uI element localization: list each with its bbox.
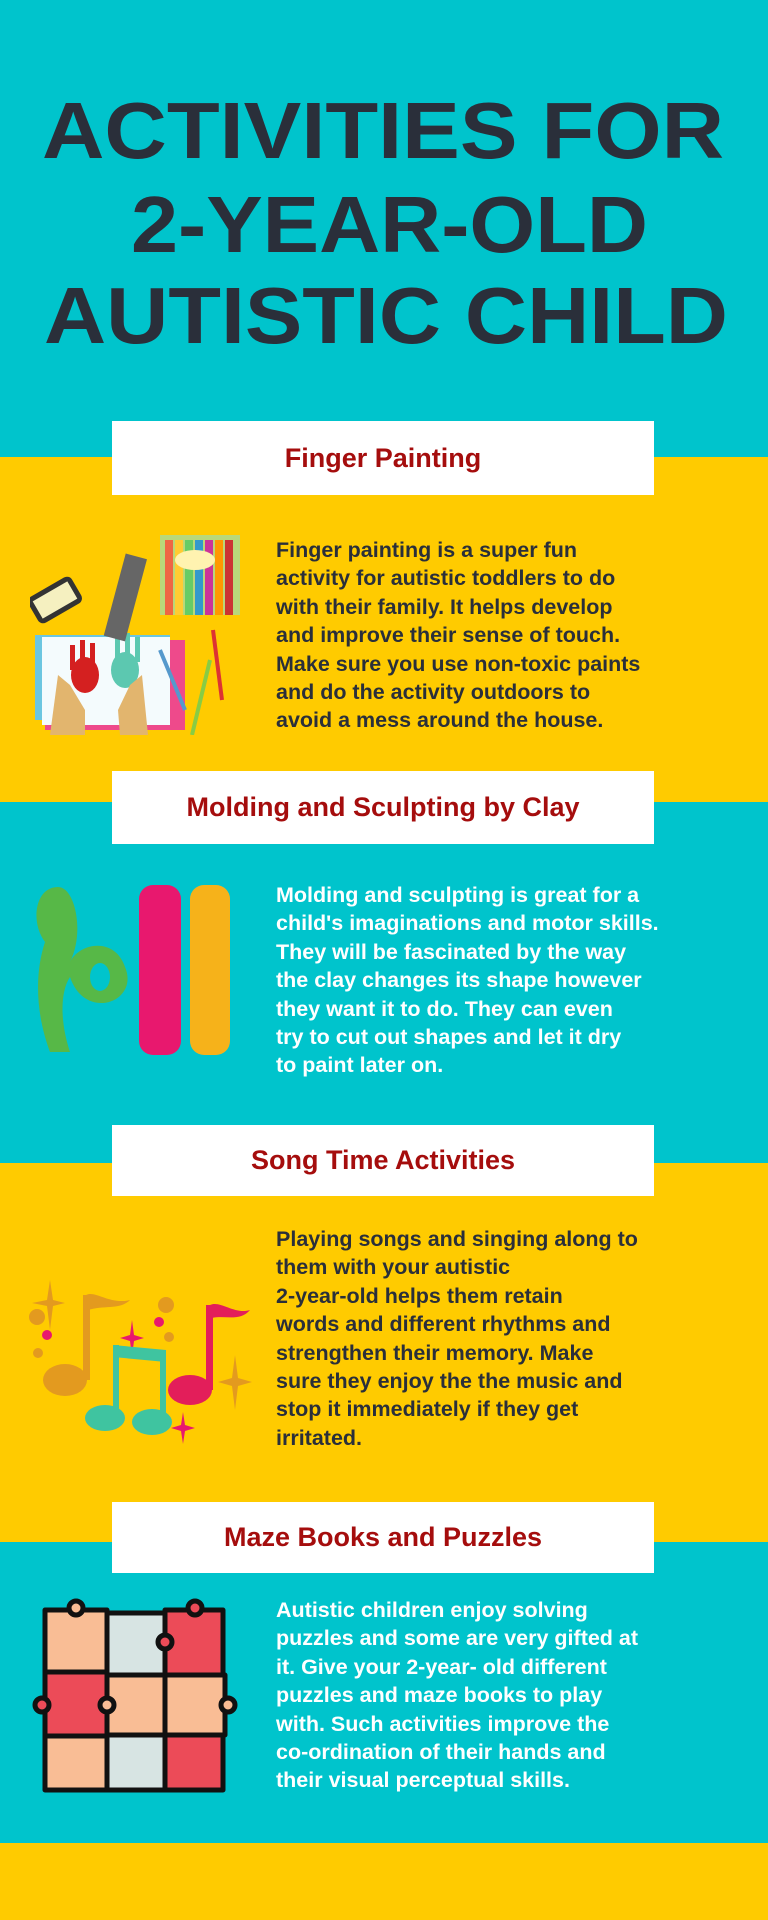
text: maze books: with. Such activities improve the bbox=[276, 1712, 609, 1736]
text: finger painting: activity for autistic toddlers to do bbox=[276, 566, 615, 590]
text: molding: to paint later on. bbox=[276, 1053, 443, 1077]
text: maze books bbox=[276, 1598, 638, 1792]
text: maze books: their visual perceptual skills. bbox=[276, 1768, 570, 1792]
icon: finger painting bbox=[30, 535, 240, 735]
text: song time: them with your autistic bbox=[276, 1255, 510, 1279]
text: song time bbox=[276, 1227, 638, 1450]
header: song time: Song Time Activities bbox=[251, 1145, 515, 1175]
text: molding: they want it to do. They can even bbox=[276, 997, 613, 1021]
text: molding: Molding and sculpting is great for a bbox=[276, 883, 639, 907]
text: molding: They will be fascinated by the way bbox=[276, 940, 626, 964]
text: finger painting: and do the activity outdoors to bbox=[276, 680, 590, 704]
text: finger painting: with their family. It helps develop bbox=[276, 595, 612, 619]
text: molding: child's imaginations and motor skills. bbox=[276, 911, 659, 935]
title: AUTISTIC CHILD bbox=[44, 271, 728, 360]
title bbox=[42, 86, 728, 360]
icon: puzzle bbox=[32, 1598, 238, 1792]
text: molding bbox=[276, 883, 659, 1077]
header: finger painting: Finger Painting bbox=[285, 442, 481, 472]
text: molding: try to cut out shapes and let it dry bbox=[276, 1025, 621, 1049]
header: molding bbox=[112, 771, 654, 844]
text: maze books: puzzles and maze books to play bbox=[276, 1683, 602, 1707]
header: finger painting bbox=[112, 421, 654, 495]
text: maze books: it. Give your 2-year- old different bbox=[276, 1655, 607, 1679]
text: finger painting bbox=[276, 538, 640, 732]
text: song time: sure they enjoy the the music and bbox=[276, 1369, 622, 1393]
header: molding: Molding and Sculpting by Clay bbox=[186, 792, 580, 822]
text: song time: Playing songs and singing along to bbox=[276, 1227, 638, 1251]
title: 2-YEAR-OLD bbox=[131, 180, 648, 269]
text: song time: irritated. bbox=[276, 1426, 362, 1450]
header: maze books bbox=[112, 1502, 654, 1573]
header: song time bbox=[112, 1125, 654, 1196]
text: finger painting: and improve their sense of touch. bbox=[276, 623, 620, 647]
text: song time: words and different rhythms and bbox=[276, 1312, 610, 1336]
text: maze books: puzzles and some are very gifted at bbox=[276, 1626, 638, 1650]
text: finger painting: Make sure you use non-toxic paints bbox=[276, 652, 640, 676]
text: finger painting: Finger painting is a super fun bbox=[276, 538, 577, 562]
title: ACTIVITIES FOR bbox=[42, 86, 724, 175]
text: song time: 2-year-old helps them retain bbox=[276, 1284, 563, 1308]
text: maze books: co-ordination of their hands and bbox=[276, 1740, 606, 1764]
text: finger painting: avoid a mess around the house. bbox=[276, 708, 603, 732]
text: maze books: Autistic children enjoy solving bbox=[276, 1598, 588, 1622]
text: molding: the clay changes its shape however bbox=[276, 968, 642, 992]
text: song time: stop it immediately if they get bbox=[276, 1397, 578, 1421]
icon: music notes bbox=[29, 1280, 252, 1444]
header: maze books: Maze Books and Puzzles bbox=[224, 1522, 542, 1552]
text: song time: strengthen their memory. Make bbox=[276, 1341, 593, 1365]
icon: clay bbox=[36, 885, 230, 1055]
